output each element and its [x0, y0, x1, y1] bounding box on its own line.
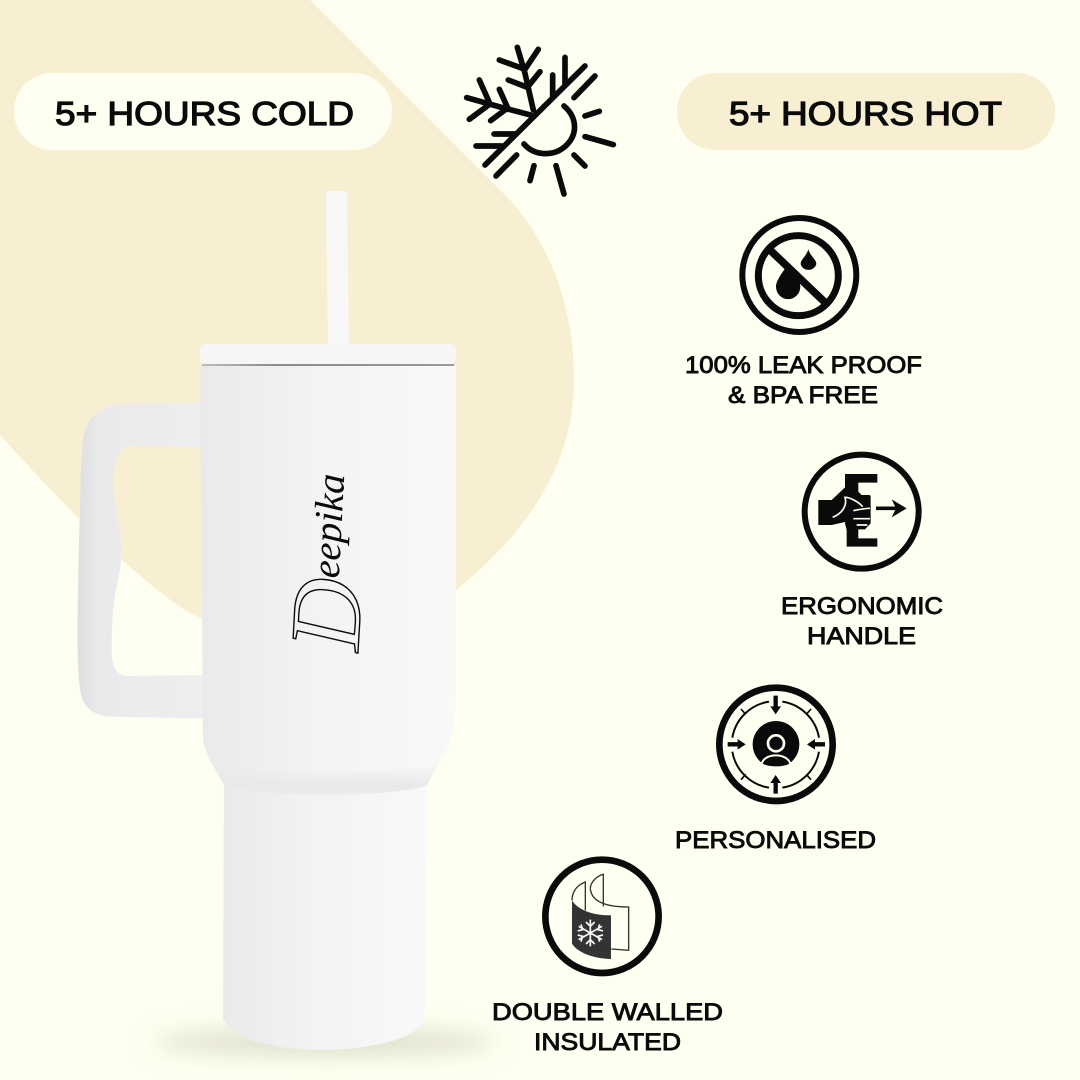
upper body: [200, 366, 456, 794]
feature: ergonomic handle: HANDLE: [807, 623, 916, 650]
label: 100% LEAK PROOF: [685, 352, 922, 379]
pill: 5+ hours cold: [14, 73, 392, 150]
label: ERGONOMIC: [781, 593, 943, 620]
personalised name: D: [269, 575, 384, 655]
feature: personalised: [675, 688, 876, 854]
feature: leak proof: [685, 218, 922, 409]
feature: ergonomic handle: [781, 455, 943, 650]
pill: 5+ hours hot: [677, 73, 1055, 150]
lid: [200, 344, 456, 365]
straw: [326, 191, 349, 346]
label: DOUBLE WALLED: [492, 999, 723, 1026]
handle: [77, 403, 205, 719]
tumbler: [77, 191, 495, 1056]
icon: double wall: [545, 860, 659, 973]
background blob: [0, 0, 574, 633]
label: PERSONALISED: [675, 827, 876, 854]
lid seam: [202, 364, 454, 366]
shadow: [155, 1028, 495, 1056]
feature: double walled insulated: [492, 860, 723, 1056]
icon: no drops: [742, 218, 856, 332]
lower cup: [223, 780, 428, 1050]
icon: snowflake and sun: [467, 47, 613, 194]
feature: double walled insulated: INSULATED: [534, 1029, 681, 1056]
personalised name: eepika: [303, 473, 353, 579]
icon: person target: [719, 688, 833, 801]
pill: 5+ hours hot: 5+ HOURS HOT: [729, 95, 1002, 132]
pill: 5+ hours cold: 5+ HOURS COLD: [55, 95, 354, 132]
feature: leak proof: & BPA FREE: [728, 382, 878, 409]
icon: hand gripping handle: [805, 455, 919, 569]
neck shading: [212, 765, 438, 795]
